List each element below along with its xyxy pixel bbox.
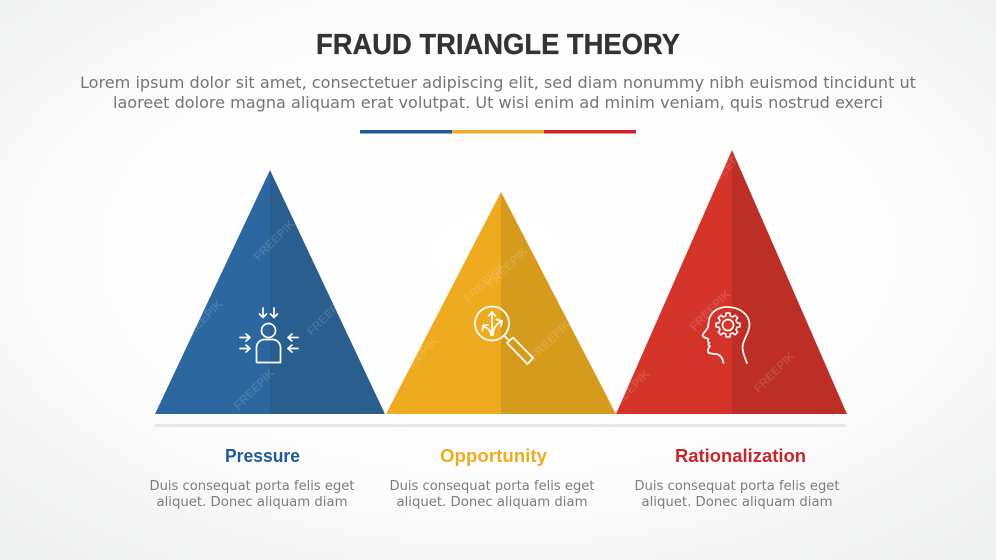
icon: magnifier with arrows [475,306,533,364]
watermarks: FREEPIK [231,366,278,413]
label: pressure: Pressure [225,445,300,466]
watermarks: FREEPIK [527,317,574,364]
label: pressure [150,445,354,510]
label: rationalization [634,445,840,510]
intro text: Lorem ipsum dolor sit amet, consectetuer adipiscing elit, sed diam nonummy nibh euismod tincidunt ut [80,73,916,92]
tricolour divider [360,130,636,134]
watermarks: FREEPIK [751,349,798,396]
panel: pressure triangle [155,170,385,414]
watermarks: FREEPIK [394,334,441,381]
watermarks: FREEPIK [484,244,531,291]
intro text: laoreet dolore magna aliquam erat volutpat. Ut wisi enim ad minim veniam, quis nostrud exerci [113,93,883,112]
icon: head with gear [702,307,750,363]
intro text [80,73,916,112]
label: opportunity: Opportunity [440,445,548,466]
watermarks: FREEPIK [606,367,653,414]
icon: person under pressure [240,308,298,362]
label: rationalization: aliquet. Donec aliquam diam [642,495,832,510]
label: pressure: aliquet. Donec aliquam diam [156,495,348,510]
label: opportunity: aliquet. Donec aliquam diam [396,495,588,510]
label: rationalization: Rationalization [675,445,806,466]
watermarks: FREEPIK [461,259,508,306]
label: opportunity: Duis consequat porta felis eget [390,479,594,494]
panel: opportunity triangle [386,192,616,414]
title: FRAUD TRIANGLE THEORY [316,29,680,61]
baseline shadow [155,424,846,427]
watermarks: FREEPIK [704,144,751,191]
watermarks: FREEPIK [251,217,298,264]
panel: rationalization triangle [616,150,847,414]
watermarks: FREEPIK [179,297,226,344]
watermarks [179,144,798,414]
watermarks: FREEPIK [304,292,351,339]
label: opportunity [390,445,594,510]
label: rationalization: Duis consequat porta felis eget [634,479,840,494]
watermarks: FREEPIK [687,287,734,334]
label: pressure: Duis consequat porta felis eget [150,479,354,494]
